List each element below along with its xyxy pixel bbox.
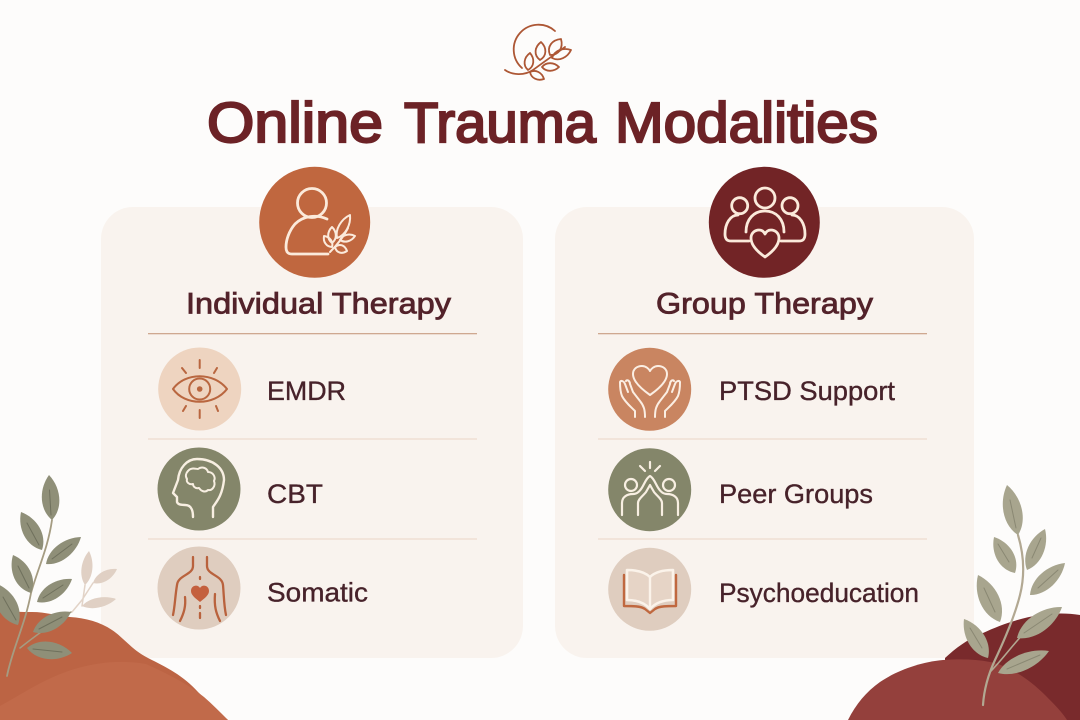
label: CBT: CBT: [267, 479, 323, 509]
title: Online: [207, 91, 383, 155]
label: Somatic: Somatic: [267, 578, 368, 608]
icon: open book: [608, 548, 691, 631]
title: Modalities: [615, 91, 878, 155]
icon: person with sprig: [259, 167, 370, 278]
icon: body with heart: [158, 546, 240, 630]
icon: logo circle with sprig: [505, 25, 573, 82]
decoration: left terracotta blob: [0, 610, 228, 720]
heading: individual therapy: Individual Therapy: [186, 288, 451, 320]
label: EMDR: EMDR: [267, 376, 346, 406]
title: Trauma: [404, 91, 596, 155]
icon: eye: [158, 348, 241, 430]
heading: group therapy: Group Therapy: [656, 288, 873, 320]
label: PTSD Support: PTSD Support: [719, 376, 896, 406]
icon: hands holding heart: [608, 348, 691, 431]
decoration: right leaf sprig: [957, 483, 1070, 705]
icon: peers high five: [608, 448, 691, 531]
title: [207, 91, 878, 155]
panel: individual therapy: [101, 167, 523, 658]
label: Psychoeducation: Psychoeducation: [719, 578, 919, 608]
panel: group therapy: [555, 167, 974, 658]
icon: head with brain: [158, 448, 240, 530]
label: Peer Groups: Peer Groups: [719, 479, 873, 509]
decoration: left leaf sprigs: [0, 474, 119, 676]
icon: group with heart: [709, 167, 820, 278]
decoration: right burgundy blobs: [848, 614, 1080, 720]
